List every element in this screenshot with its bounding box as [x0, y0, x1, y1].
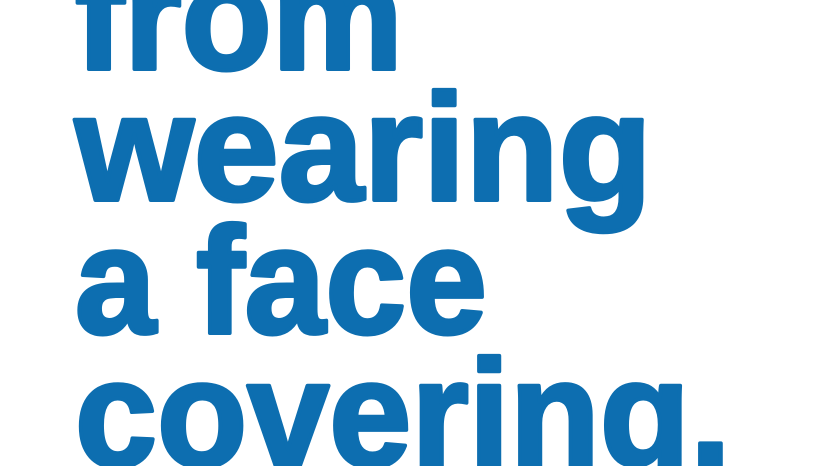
line: a face: a face	[75, 196, 487, 366]
line: wearing: wearing	[74, 63, 652, 233]
